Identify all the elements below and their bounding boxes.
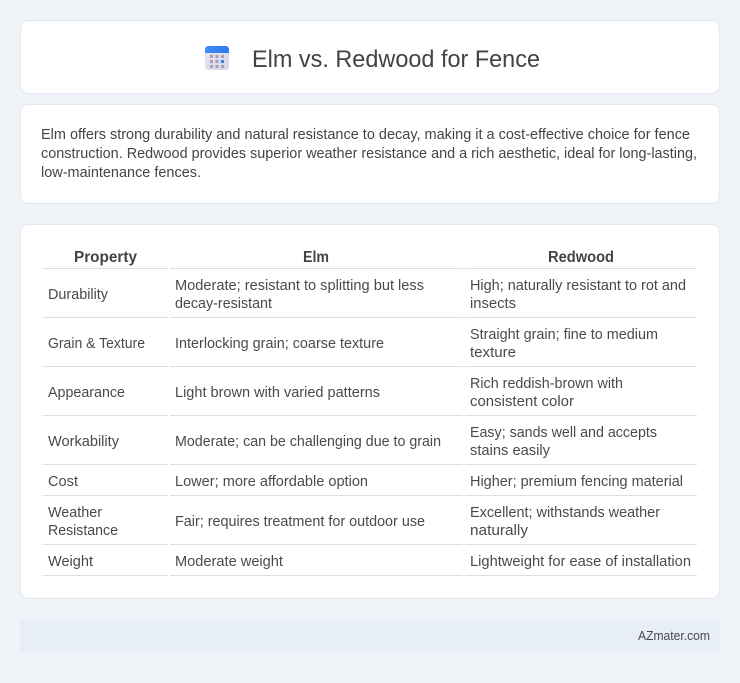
row: Cost xyxy=(48,474,683,490)
row: Appearance xyxy=(48,376,623,410)
footer xyxy=(20,619,720,653)
row: Cost: Higher; premium fencing material xyxy=(470,474,683,490)
summary text: low-maintenance fences. xyxy=(41,165,201,181)
row: Durability: Moderate; resistant to splitting but less xyxy=(175,278,424,294)
row: Weather Resistance: Resistance xyxy=(48,523,118,539)
row: Weather Resistance: naturally xyxy=(470,523,529,539)
table header row xyxy=(74,249,614,266)
row: Durability: decay-resistant xyxy=(175,296,272,312)
panel: comparison table xyxy=(20,224,720,598)
row: Durability: High; naturally resistant to rot and xyxy=(470,278,686,294)
panel: summary xyxy=(20,104,720,204)
row: Grain & Texture: Grain & Texture xyxy=(48,336,145,352)
summary text: Elm offers strong durability and natural resistance to decay, making it a cost-effective choice for fence xyxy=(41,127,690,143)
icon: calendar xyxy=(205,46,229,70)
row: Weight: Weight xyxy=(48,554,93,570)
row: Weather Resistance: Excellent; withstands weather xyxy=(470,505,660,521)
row: Workability: Workability xyxy=(48,434,120,450)
title: Elm vs. Redwood for Fence xyxy=(252,46,540,73)
row: Weight: Moderate weight xyxy=(175,554,283,570)
row: Appearance: consistent color xyxy=(470,394,574,410)
footer attribution: AZmater.com xyxy=(638,629,710,643)
row: Appearance: Appearance xyxy=(48,385,125,401)
row: Appearance: Rich reddish-brown with xyxy=(470,376,623,392)
row: Workability xyxy=(48,425,657,459)
row: Workability: Moderate; can be challenging due to grain xyxy=(175,434,441,450)
row: Workability: Easy; sands well and accepts xyxy=(470,425,657,441)
row: Cost: Lower; more affordable option xyxy=(175,474,368,490)
row: Durability: Durability xyxy=(48,287,109,303)
summary text xyxy=(41,127,697,181)
row: Cost: Cost xyxy=(48,474,78,490)
row: Grain & Texture xyxy=(48,327,658,361)
row: Grain & Texture: Straight grain; fine to medium xyxy=(470,327,658,343)
row: Durability xyxy=(48,278,686,312)
table header row: Property xyxy=(74,249,137,266)
row: Weight xyxy=(48,554,691,570)
row: Weather Resistance: Fair; requires treatment for outdoor use xyxy=(175,514,425,530)
summary text: construction. Redwood provides superior weather resistance and a rich aesthetic, ideal for long-lasting, xyxy=(41,146,697,162)
table header row: Redwood xyxy=(548,249,614,266)
row: Grain & Texture: Interlocking grain; coarse texture xyxy=(175,336,384,352)
row: Weight: Lightweight for ease of installation xyxy=(470,554,691,570)
row: Workability: stains easily xyxy=(470,443,551,459)
row: Weather Resistance xyxy=(48,505,660,539)
row: Durability: insects xyxy=(470,296,516,312)
row: Weather Resistance: Weather xyxy=(48,505,102,521)
header panel xyxy=(20,20,720,94)
row: Appearance: Light brown with varied patterns xyxy=(175,385,380,401)
table header row: Elm xyxy=(303,249,329,266)
row: Grain & Texture: texture xyxy=(470,345,516,361)
